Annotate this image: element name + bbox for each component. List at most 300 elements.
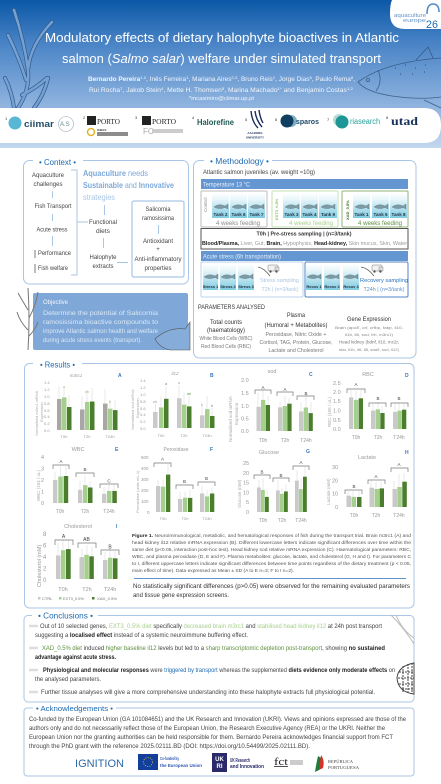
panel: conclusions — [24, 610, 414, 702]
logo: U.Porto ICBAS: 2 — [83, 115, 86, 120]
chart C: sod: Expression — [234, 402, 239, 425]
panel: results — [24, 358, 414, 608]
chart B: il12: 0.6 — [140, 406, 146, 411]
logo: riasearch: 7 — [327, 117, 330, 122]
chart A: m3rc1: T2h — [84, 434, 90, 439]
chart D: RBC: 1.5 — [333, 399, 341, 405]
chart D: RBC: B — [376, 396, 380, 401]
box: Salicornia properties: Salicornia — [146, 207, 171, 213]
chart I: cholesterol: Cholesterol (mM) — [37, 545, 43, 587]
icon: salmon outline — [358, 47, 441, 108]
parameters: gene expression: Head kidney (bdnf, il10, mc2r, — [339, 340, 399, 344]
authors — [88, 75, 355, 102]
logo: aquaculture europe 26 — [390, 0, 441, 31]
parameters: plasma — [260, 312, 333, 354]
heading: acknowledgements: • Acknowledgements • — [36, 704, 113, 713]
legend — [38, 596, 117, 601]
figure caption: Figure 1. Neuroimmunological, metabolic, and hematological responses of fish during the transport trial. Brain m3rc1 (A) and — [132, 533, 412, 538]
logo: ciimar — [5, 116, 74, 132]
chart A: m3rc1: 0.6 — [44, 408, 50, 413]
authors: 6 — [309, 75, 313, 80]
strategies statement — [83, 169, 174, 202]
chart D: RBC: 0.0 — [333, 427, 341, 433]
chart F: peroxidase: F — [210, 447, 213, 453]
title — [45, 30, 400, 66]
objective text: Determine the potential of Salicornia — [43, 311, 159, 317]
chart B: il12: 1.4 — [140, 378, 146, 383]
authors: , Bruno Reis — [237, 77, 273, 83]
chart E: WBC: 3 — [41, 466, 44, 472]
logo: Ignition: IGNITION — [75, 758, 124, 770]
logo: U.Porto ICBAS — [83, 115, 128, 136]
parameters: plasma: Lactate and Cholesterol — [268, 348, 324, 354]
group: EXT3 tanks: Tank 4 — [303, 212, 317, 217]
legend: EXT3_0.5% — [63, 596, 84, 601]
logo: ciimar: A.S — [60, 122, 70, 128]
chart B: il12: Normalised sod mRNA — [130, 389, 135, 430]
chart B: il12: 0.2 — [140, 419, 146, 424]
chart I: cholesterol: T24h — [104, 587, 116, 593]
panel: context — [24, 155, 188, 284]
logo: UKRI — [212, 753, 264, 772]
parameters: plasma: Cortisol, TAG, Protein, Glucose, — [260, 340, 333, 346]
parameters: gene expression: Brain (apoE, crf, crfbp, fabp, il10, — [335, 325, 403, 330]
parameters: plasma: Plasma — [287, 312, 305, 319]
funding text: European Union nor the granting authorities can be held responsible for them. Bernardo Pereira acknowledges financial support from FCT — [29, 735, 393, 741]
chart H: lactate: T2h — [372, 513, 381, 519]
logo: U.Porto FCUP: 3 — [135, 115, 138, 120]
logo: utad: 8 — [386, 115, 389, 120]
chart I: cholesterol: 8 — [43, 532, 47, 538]
chart F: peroxidase: T24h — [202, 516, 212, 521]
chart D: RBC: 0.5 — [333, 418, 341, 424]
authors: 4 — [161, 86, 164, 91]
logo: aquaculture europe 26: europe — [403, 18, 426, 24]
logo: sparos: sparos — [296, 117, 319, 126]
group: stress tanks: T2h | (n=3/tank) — [262, 287, 299, 293]
chart F: peroxidase: Peroxidase — [163, 447, 189, 453]
header background — [0, 0, 441, 148]
logo: aquaculture europe 26: 26 — [426, 19, 438, 31]
chart D: RBC: RBC (106 / uL) — [327, 396, 332, 427]
group: control tanks: Control — [203, 197, 208, 212]
logo: República Portuguesa — [315, 755, 360, 772]
chart H: lactate: A — [397, 462, 401, 467]
figure caption: WBC, and plasma peroxidase (D, E and F). Plasma metabolites: glucose, lactate, and cholesterol (G, H and I). For parameters C — [132, 554, 412, 559]
authors: and Benjamin Costas — [282, 88, 347, 94]
authors: 5 — [222, 86, 225, 91]
chart E: WBC: 4 — [41, 455, 44, 461]
chart B: il12: b — [201, 402, 204, 407]
chart G: glucose: Glucose — [259, 450, 279, 456]
chart E: WBC: T0h — [56, 509, 65, 515]
objective text: during acute stress events (transport). — [43, 338, 142, 344]
authors: , Jorge Dias — [275, 77, 309, 83]
chart D: RBC: T0h — [352, 435, 361, 441]
chart B: il12: B — [210, 373, 214, 379]
arrow: bracket to functional diets — [71, 170, 88, 275]
chart C: sod: A — [283, 387, 287, 392]
logo: sparos — [275, 114, 319, 128]
group: XAD tanks: 4 weeks feeding — [358, 221, 402, 227]
logo: República Portuguesa: REPÚBLICA — [328, 759, 354, 764]
authors: Rui Rocha — [89, 88, 117, 94]
authors: 1,2 — [347, 86, 354, 91]
chart I: cholesterol: I — [116, 524, 118, 530]
chart I: cholesterol: 0 — [43, 578, 47, 584]
parameters: plasma: (Humoral + Metabolites) — [264, 322, 328, 329]
chart E: WBC: WBC — [72, 447, 84, 453]
group: stress tanks: Stress 1 — [203, 284, 219, 289]
authors: , Paulo Rema — [312, 77, 352, 83]
chart A: m3rc1: 0.4 — [44, 414, 50, 419]
chart G: glucose: Glucose (mM) — [237, 479, 242, 508]
strategies statement: Sustainable and Innovative — [83, 181, 174, 190]
chart B: il12: ab — [153, 399, 158, 404]
chart F: peroxidase: T2h — [182, 516, 188, 521]
logo: UKRI: UK Research — [230, 758, 250, 764]
chart B: il12: a — [165, 381, 168, 386]
icon: plant — [17, 288, 38, 350]
funding text: authors only and do not necessarily reflect those of the European Union, the Research Executive Agency (REA) or the UKRI. Neither the — [29, 726, 386, 732]
authors: , — [353, 77, 355, 83]
middle flow — [89, 205, 128, 270]
group: recovery tanks — [305, 262, 408, 297]
middle flow: Functional — [89, 220, 117, 226]
chart E: WBC: 0 — [41, 501, 44, 507]
chart D: RBC: D — [405, 373, 409, 379]
chart A: m3rc1: 0.0 — [44, 428, 50, 433]
chart B: il12: b — [211, 403, 214, 408]
bar: acute stress: Acute stress (6h transportation) — [203, 254, 281, 260]
panel: objective — [17, 288, 190, 350]
group: stress tanks — [201, 262, 303, 297]
chart D: RBC: T2h — [374, 435, 383, 441]
middle flow: extracts — [92, 264, 114, 270]
parameters: gene expression: star, il1b, il6, il8, saa5, sod, il12) — [339, 347, 400, 352]
logo: Halorefine — [192, 115, 235, 127]
chart G: glucose — [237, 449, 310, 524]
group: EXT3 tanks: Tank 3 — [285, 212, 299, 217]
chart A: m3rc1: 1.0 — [44, 394, 50, 399]
chart H: lactate: B — [352, 484, 356, 489]
logo: U.Porto FCUP: FC — [143, 127, 154, 136]
box: Salicornia properties: + — [156, 247, 160, 253]
figure caption — [132, 533, 412, 573]
logo: Halorefine: 4 — [192, 115, 195, 120]
conclusion text: Physiological and molecular responses were triggered by transport whereas the supplemented diets evidence only moderate effects on — [43, 668, 395, 674]
chart F: peroxidase: 0 — [147, 510, 150, 515]
logo: UKRI: and Innovation — [230, 764, 264, 770]
objective text: improve Atlantic salmon health and welfare — [43, 329, 159, 335]
figure caption: to I, different uppercase letters indicate significant differences between time points regardless of the dietary treatment (p < 0.05, — [132, 561, 411, 566]
chart C: sod: 1.5 — [241, 391, 249, 397]
legend: XAD_0.5% — [97, 596, 117, 601]
group: XAD tanks: XAD_0,5% — [345, 200, 350, 220]
panel: acknowledgements — [24, 703, 414, 776]
chart E: WBC: C — [107, 478, 111, 484]
group: XAD tanks: Tank 5 — [374, 212, 388, 217]
left flow: Acute stress — [36, 228, 68, 234]
chart H: lactate: 20 — [332, 478, 338, 484]
chart I: cholesterol: A — [62, 534, 66, 540]
logo: riasearch — [327, 114, 380, 128]
authors: 2,3 — [231, 75, 238, 80]
chart E: WBC: B — [83, 467, 87, 472]
logo: Aalborg University — [245, 110, 264, 140]
authors: 1 — [186, 75, 189, 80]
conclusion arrows — [29, 626, 38, 692]
authors: 1* — [278, 86, 282, 91]
box: Salicornia properties: properties — [144, 266, 172, 272]
group: stress tanks: Stress 3 — [238, 284, 255, 289]
conclusion text: the analysed parameters. — [35, 677, 101, 683]
logo: riasearch: riasearch — [350, 117, 380, 126]
authors: , Mariana Aires — [189, 77, 231, 83]
parameters: gene expression: Gene Expression — [347, 316, 391, 323]
left flow: Fish welfare — [38, 266, 69, 272]
chart H: lactate — [326, 450, 409, 519]
box: T0h sampling: Blood/Plasma, Liver, Gut, Brain, Hypophysis, Head-kidney, Skin mucus, Skin, Water — [202, 241, 407, 247]
chart E: WBC: WBC (104 / uL) — [36, 469, 41, 501]
logo: utad — [386, 115, 419, 128]
objective text — [43, 300, 159, 344]
chart G: glucose: T24h — [295, 518, 307, 524]
chart A: m3rc1 — [34, 373, 122, 439]
logo: UKRI: RI — [216, 764, 223, 770]
chart H: lactate: T24h — [393, 513, 405, 519]
parameters: gene expression — [335, 316, 403, 352]
chart I: cholesterol: AB — [83, 537, 90, 543]
strategies statement: strategies — [83, 193, 115, 202]
species note: Atlantic salmon juveniles (av. weight ≈10g) — [203, 170, 315, 176]
chart G: glucose: 10 — [243, 490, 249, 496]
logo: FCT — [274, 756, 303, 768]
group: recovery tanks: Recovery sampling — [360, 278, 408, 284]
chart B: il12: Expression — [135, 398, 140, 418]
logo: FCT: fct — [274, 756, 288, 768]
chart C: sod: Normalised sod mRNA — [228, 396, 233, 442]
logo: U.Porto ICBAS: ICBAS — [97, 128, 106, 132]
group: XAD tanks: Tank 1 — [355, 212, 369, 217]
chart H: lactate: H — [405, 450, 409, 456]
logo: EU co-funded: the European Union — [160, 763, 202, 768]
chart H: lactate: A — [374, 474, 378, 479]
chart A: m3rc1: 0.2 — [44, 421, 50, 426]
icon: fish — [155, 322, 190, 350]
chart B: il12 — [130, 371, 214, 438]
authors: 7 — [120, 86, 123, 91]
chart E: WBC: T24h — [103, 509, 115, 515]
chart F: peroxidase: 400 — [141, 466, 149, 471]
chart A: m3rc1: 1.4 — [44, 380, 50, 385]
note: no significant differences: and tissue gene expression screens. — [133, 593, 229, 599]
chart F: peroxidase: 300 — [141, 477, 149, 482]
logo: U.Porto ICBAS: PORTO — [97, 117, 121, 126]
chart F: peroxidase: B — [205, 476, 208, 481]
box: Salicornia properties: Anti-inflammatory — [134, 257, 182, 263]
authors: , Inês Ferreira — [146, 77, 187, 83]
funding text — [29, 717, 407, 750]
chart A: m3rc1: ab — [85, 389, 90, 394]
chart A: m3rc1: b — [109, 399, 112, 404]
bar: temperature: Temperature 13 °C — [203, 182, 251, 188]
chart D: RBC: T24h — [393, 435, 405, 441]
chart E: WBC — [36, 447, 119, 515]
chart D: RBC: A — [354, 382, 358, 387]
middle flow: diets — [96, 229, 110, 235]
chart C: sod: sod — [268, 369, 276, 375]
logo: aquaculture europe 26: aquaculture — [394, 13, 426, 19]
box: Salicornia properties: Antioxidant — [143, 239, 173, 245]
bar: acute stress — [201, 251, 408, 261]
logo: Aalborg University: AALBORG — [247, 131, 263, 135]
chart G: glucose: 5 — [246, 500, 249, 506]
box: Salicornia properties: ramosissima — [142, 216, 175, 222]
chart H: lactate: 10 — [332, 492, 338, 498]
figure caption: main effect of time). Data expressed as Mean ± SD (A to E n=3; F to I n=2). — [132, 568, 294, 573]
chart E: WBC: 2 — [41, 478, 44, 484]
parameters: total counts: White Blood Cells (WBC) — [200, 336, 253, 342]
logo: Halorefine: Halorefine — [197, 118, 235, 127]
chart E: WBC: E — [115, 447, 119, 453]
chart D: RBC — [327, 372, 409, 441]
authors: *mcasimiro@ciimar.up.pt — [189, 96, 255, 102]
chart I: cholesterol: T0h — [58, 587, 68, 593]
chart D: RBC: 2.0 — [333, 390, 341, 396]
conclusion text: XAD_0.5% diet induced higher baseline il12 levels but led to a sharp transcriptomic depletion post-transport, showing no sustained — [42, 646, 385, 652]
chart A: m3rc1: T0h — [61, 434, 67, 439]
left flow — [32, 173, 72, 273]
chart F: peroxidase: A — [161, 456, 164, 462]
chart H: lactate: 0 — [335, 505, 338, 511]
group: recovery tanks: T24h | (n=3/tank) — [364, 287, 405, 293]
chart I: cholesterol: 4 — [43, 555, 47, 561]
middle flow: Halophyte — [90, 255, 117, 261]
chart G: glucose: T0h — [259, 518, 268, 524]
chart G: glucose: 15 — [243, 480, 249, 486]
group: EXT3 tanks: Tank 9 — [321, 212, 335, 217]
authors: 1 — [273, 75, 276, 80]
title: salmon (Salmo salar) welfare under simulated transport — [62, 51, 381, 66]
group: EXT3 tanks: EXT3_0,5% — [274, 198, 279, 220]
chart E: WBC: 1 — [41, 490, 44, 496]
chart B: il12: 0.8 — [140, 399, 146, 404]
logo: sparos: 6 — [275, 117, 278, 122]
chart F: peroxidase: 500 — [141, 455, 149, 460]
conclusion text: Out of 10 selected genes, EXT3_0.5% diet specifically decreased brain m3rc1 and stabilised head kidney il12 at 24h post transport — [40, 624, 382, 630]
chart F: peroxidase: Peroxidase (units mL-1) — [135, 470, 140, 513]
chart G: glucose: 25 — [243, 461, 249, 467]
bar: temperature — [201, 179, 408, 189]
chart B: il12: 0.0 — [140, 426, 146, 431]
group: recovery tanks: Recov 2 — [324, 284, 340, 289]
group: EXT3 tanks — [272, 191, 338, 227]
chart D: RBC: RBC — [362, 372, 374, 378]
group: recovery tanks: Recov 3 — [343, 284, 359, 289]
logo: ciimar: ciimar — [24, 119, 54, 130]
chart A: m3rc1: Normalised m3rc1 mRNA — [34, 390, 39, 436]
left flow: Aquaculture — [32, 173, 65, 179]
logo: ciimar: 1 — [5, 116, 8, 121]
divider — [134, 577, 406, 580]
icon: halophyte plant — [5, 10, 52, 108]
parameters: total counts — [200, 319, 253, 350]
figure caption: head kidney il12 relative mRNA expression (B). Different lowercase letters indicate significant differences over time within the — [132, 540, 412, 545]
chart F: peroxidase: B — [183, 479, 186, 484]
chart D: RBC: 2.5 — [333, 381, 341, 387]
left flow: Fish Transport — [34, 204, 72, 210]
chart C: sod: 1.0 — [241, 404, 249, 410]
heading: conclusions: • Conclusions • — [38, 612, 93, 620]
funding text: Co-funded by the European Union (GA 101084651) and the UK Research and Innovation (UKRI). Views and opinions expressed are those of the — [29, 717, 407, 723]
logo: utad: utad — [391, 116, 419, 128]
chart A: m3rc1: 1.2 — [44, 387, 50, 392]
funding text: through the PhD grant with the reference 2025.02111.BD (DOI: https://doi.org/10.54499/2025.02111.BD). — [29, 744, 310, 750]
chart B: il12: 0.4 — [140, 412, 146, 417]
chart F: peroxidase: 200 — [141, 488, 149, 493]
conclusion text — [35, 624, 395, 696]
objective text: ramosissima bioactive compounds to — [43, 320, 159, 326]
chart B: il12: il12 — [171, 371, 179, 376]
chart H: lactate: Lactate (mM) — [326, 478, 331, 505]
logo: Aalborg University: UNIVERSITY — [246, 136, 264, 140]
heading: methodology: • Methodology • — [210, 157, 269, 166]
note: no significant differences — [133, 584, 410, 599]
logo: U.Porto FCUP: PORTO — [152, 117, 177, 126]
box: T0h sampling — [201, 228, 408, 249]
heading: parameters analysed: PARAMETERS ANALYSED — [198, 305, 266, 311]
objective text: Objective — [43, 300, 69, 306]
chart C: sod: 0.5 — [241, 416, 249, 422]
chart D: RBC: B — [397, 396, 401, 401]
chart I: cholesterol: B — [108, 544, 112, 550]
chart C: sod: T0h — [259, 438, 268, 444]
icon: molecule sphere — [397, 663, 414, 694]
figure caption: same diet (p<0.05, interaction post-hoc test). Head kidney sod relative mRNA expression (C). Haematological parameters: RBC, — [132, 547, 411, 552]
chart B: il12: 1.0 — [140, 392, 146, 397]
chart B: il12: T24h — [202, 433, 212, 438]
authors: 1,2 — [140, 75, 147, 80]
chart C: sod: T2h — [281, 438, 290, 444]
panel: methodology — [194, 155, 416, 358]
conclusion text: suggesting a localised effect instead of a systemic neuroimmune buffering effect. — [35, 633, 248, 639]
chart G: glucose: 20 — [243, 471, 249, 477]
parameters: plasma: Peroxidase, Nitric Oxide + — [266, 332, 326, 338]
chart H: lactate: T0h — [350, 513, 359, 519]
chart G: glucose: 0 — [246, 510, 249, 516]
chart H: lactate: 30 — [332, 465, 338, 471]
chart A: m3rc1: A — [118, 373, 122, 379]
conclusion text: advantage against acute stress. — [35, 655, 116, 661]
chart A: m3rc1: 0.8 — [44, 401, 50, 406]
icon: DNA helix — [391, 615, 414, 644]
chart C: sod: C — [309, 372, 313, 378]
group: stress tanks: Stress 2 — [220, 284, 237, 289]
chart I: cholesterol: 6 — [43, 544, 47, 550]
group: control tanks: Tank 2 — [214, 212, 228, 217]
chart G: glucose: B — [260, 470, 264, 474]
logo: EU co-funded — [138, 754, 202, 770]
group: stress tanks: Stress sampling — [260, 278, 299, 284]
logo: U.Porto FCUP — [135, 115, 183, 136]
group: recovery tanks: Recov 1 — [306, 284, 322, 289]
conclusion text: Further tissue analyses will give a more comprehensive understanding into these halophyte extracts full physiological potential. — [41, 690, 375, 696]
chart C: sod: 2.0 — [241, 378, 249, 384]
chart I: cholesterol — [37, 524, 119, 593]
chart C: sod: B — [304, 391, 308, 396]
logo: UKRI: UK — [215, 757, 224, 763]
